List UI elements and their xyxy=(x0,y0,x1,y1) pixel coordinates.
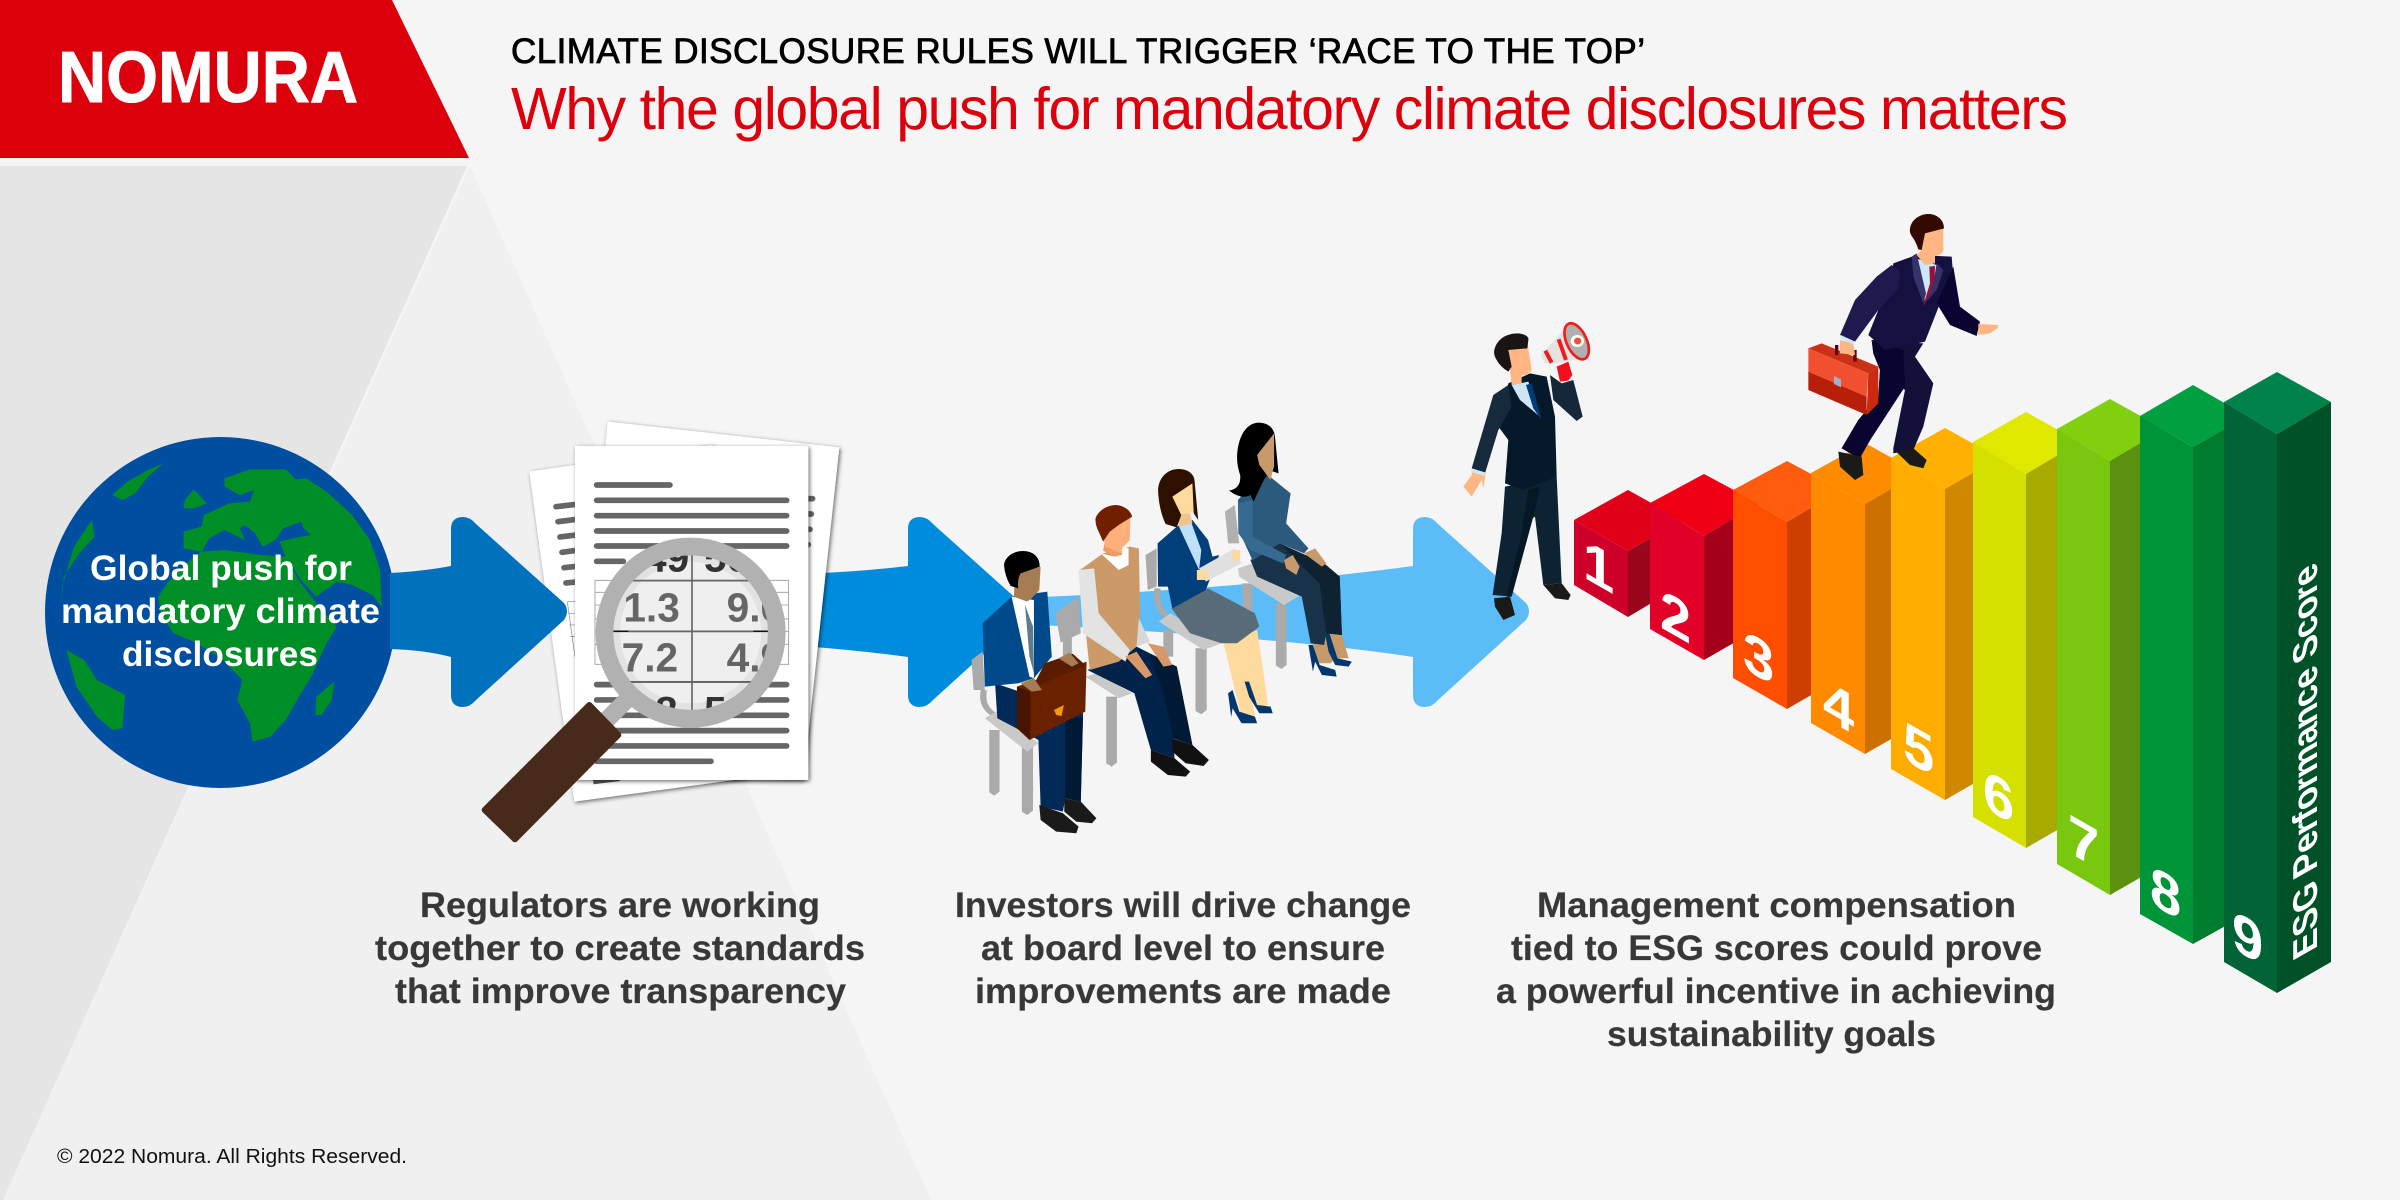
investor 2: man in tan vest xyxy=(1055,505,1209,777)
magnifier lens xyxy=(605,534,783,734)
bar 2 xyxy=(1650,474,1758,660)
magnifier lens: 9.6 xyxy=(727,584,783,630)
magnifier lens: 49 xyxy=(644,534,689,580)
text block: investors: at board level to ensure xyxy=(981,928,1385,968)
icon: documents and magnifying glass xyxy=(485,422,839,839)
text block: management: Management compensation xyxy=(1537,885,2016,925)
icon: megaphone xyxy=(1541,320,1594,382)
magnifier lens: 53 xyxy=(704,688,749,734)
text block: regulators: Regulators are working xyxy=(420,885,820,925)
investor 4: woman in blue top xyxy=(1225,423,1352,677)
figure: man climbing with briefcase xyxy=(1808,214,1998,480)
magnifier lens: 8 xyxy=(655,688,678,734)
back left page xyxy=(529,445,747,802)
figures: seated investors xyxy=(971,423,1352,833)
bar 6: 6 xyxy=(1983,756,2014,837)
globe label xyxy=(61,548,380,674)
back right page xyxy=(577,422,839,780)
magnifier handle rod xyxy=(597,697,630,730)
bar 1 xyxy=(1574,490,1682,617)
magnifier lens: 1.3 xyxy=(623,584,680,630)
magnifier handle xyxy=(485,705,618,839)
globe label: mandatory climate xyxy=(61,591,380,631)
arrow 2: mid blue xyxy=(800,517,1024,707)
investor 1: man with briefcase xyxy=(971,551,1096,833)
arrow 3: light blue xyxy=(1040,517,1529,707)
front page xyxy=(575,446,808,780)
bar 6 xyxy=(1973,412,2080,848)
heading: kicker: CLIMATE DISCLOSURE RULES WILL TRIGGER ‘RACE TO THE TOP’ xyxy=(511,32,1645,71)
heading: main title: Why the global push for mandatory climate disclosures matters xyxy=(511,76,2068,142)
icon: red briefcase xyxy=(1808,335,1878,415)
bar 1: 1 xyxy=(1583,526,1614,607)
text block: management: sustainability goals xyxy=(1607,1014,1936,1054)
globe label: disclosures xyxy=(122,634,318,674)
text block: investors xyxy=(955,885,1411,1011)
globe label: Global push for xyxy=(90,548,352,588)
grey background shape xyxy=(0,166,467,1200)
continents xyxy=(61,463,382,742)
text block: regulators: that improve transparency xyxy=(395,971,846,1011)
text block: management xyxy=(1496,885,2056,1054)
text block: regulators xyxy=(375,885,865,1011)
bar 5: 5 xyxy=(1903,708,1934,789)
text block: regulators: together to create standards xyxy=(375,928,865,968)
text block: management: a powerful incentive in achieving xyxy=(1496,971,2056,1011)
bar 2: 2 xyxy=(1660,576,1691,657)
light triangle background xyxy=(3,166,931,1200)
bar 3: 3 xyxy=(1743,617,1774,698)
axis label: ESG Performance Score xyxy=(2285,556,2324,967)
bar 7: 7 xyxy=(2068,801,2099,882)
magnifier lens: 4.9 xyxy=(727,635,783,681)
magnifier lens: 7.2 xyxy=(622,635,678,681)
text block: investors: improvements are made xyxy=(975,971,1391,1011)
bar 4 xyxy=(1811,443,1919,754)
magnifier lens: 56 xyxy=(704,534,749,580)
bar 5 xyxy=(1891,428,1999,800)
text block: management: tied to ESG scores could prove xyxy=(1511,928,2042,968)
bar 3 xyxy=(1733,461,1841,709)
bar 8 xyxy=(2140,385,2247,944)
bar 4: 4 xyxy=(1823,666,1855,747)
chart: ESG performance score staircase xyxy=(1574,372,2331,993)
bar 9: 9 xyxy=(2232,897,2263,978)
text block: investors: Investors will drive change xyxy=(955,885,1411,925)
bar 7 xyxy=(2057,399,2164,895)
copyright: © 2022 Nomura. All Rights Reserved. xyxy=(57,1146,407,1168)
bar 9 xyxy=(2224,372,2331,993)
bar 8: 8 xyxy=(2150,852,2181,933)
icon: globe xyxy=(45,437,396,788)
investor 3: woman in navy blazer xyxy=(1146,469,1273,723)
header red banner xyxy=(0,0,469,158)
figure: man with megaphone xyxy=(1463,320,1594,620)
logo: NOMURA: NOMURA xyxy=(58,38,358,118)
arrow 1: dark blue xyxy=(390,517,567,707)
